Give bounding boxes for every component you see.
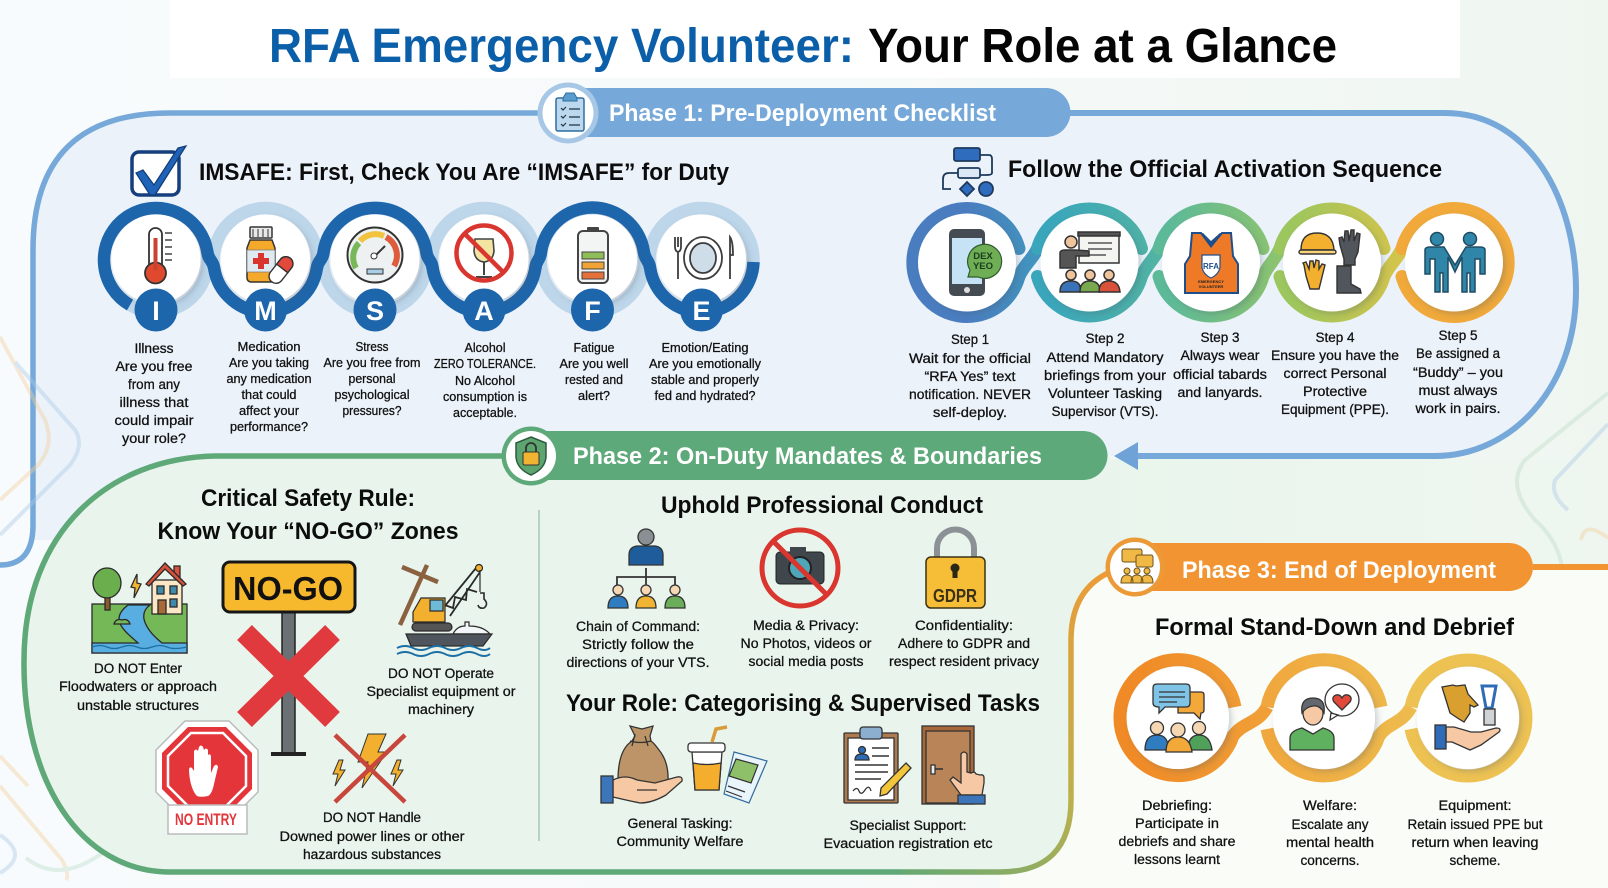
text: medication: that could <box>242 388 296 402</box>
icon: phone with text bubble <box>949 229 1002 296</box>
text: step 5: must always <box>1418 383 1498 398</box>
icon: plate and cutlery <box>675 237 733 279</box>
icon: tabard vest: VOLUNTEER <box>1199 284 1223 289</box>
text: fatigue: Fatigue <box>574 341 614 355</box>
icon: debrief group <box>1121 549 1153 583</box>
text: do not enter: Floodwaters or approach <box>59 679 217 694</box>
text: illness: could impair <box>114 413 194 428</box>
icon: flood and house <box>92 563 187 653</box>
heading: critical safety rule <box>158 485 458 545</box>
text: do not operate <box>366 666 516 717</box>
text: emotion: Are you emotionally <box>649 357 762 371</box>
text: do not operate: Specialist equipment or <box>366 684 516 699</box>
imsafe letters: A <box>474 296 494 326</box>
text: debriefing: Debriefing: <box>1142 798 1212 813</box>
text: do not handle <box>280 810 465 862</box>
icon: hand with bag <box>601 726 682 803</box>
text: medication <box>226 340 312 434</box>
text: debriefing: Participate in <box>1135 816 1219 831</box>
text: media and privacy: No Photos, videos or <box>740 636 872 651</box>
text: illness: illness that <box>120 395 189 410</box>
imsafe letters <box>134 288 723 332</box>
text: step 5 <box>1413 328 1503 416</box>
phase 1 banner: Phase 1: Pre-Deployment Checklist <box>609 100 996 127</box>
text: medication: Are you taking <box>229 356 309 370</box>
text: alcohol <box>434 341 536 420</box>
activation heading: Follow the Official Activation Sequence <box>1008 156 1442 183</box>
phase 1 banner <box>538 82 1070 144</box>
text: step 3 <box>1173 330 1267 400</box>
text: step 1: Step 1 <box>951 332 989 347</box>
text: illness: from any <box>128 377 180 392</box>
text: stress: personal <box>348 372 396 386</box>
text: stress <box>324 340 420 418</box>
text: do not enter: unstable structures <box>77 698 199 713</box>
text: step 5: “Buddy” – you <box>1413 365 1503 380</box>
text: equipment: Retain issued PPE but <box>1408 817 1543 832</box>
text: media and privacy: social media posts <box>748 654 864 669</box>
text: chain of command <box>566 619 710 670</box>
panel: phase 2 background and outline <box>24 456 1110 872</box>
imsafe letters: M <box>254 296 277 326</box>
text: emotion: stable and properly <box>651 373 760 387</box>
icon: equipment return <box>1435 685 1500 750</box>
text: step 1: Wait for the official <box>909 351 1031 366</box>
text: step 4: Protective <box>1303 384 1367 399</box>
icon: crane and boat <box>397 564 492 656</box>
text: step 3: Step 3 <box>1200 330 1240 345</box>
heading: critical safety rule: Critical Safety Rule: <box>201 485 415 512</box>
text: step 3: official tabards <box>1173 367 1267 382</box>
text: illness: your role? <box>122 431 186 446</box>
text: fatigue: rested and <box>565 373 623 387</box>
icon: checkbox <box>132 146 186 195</box>
text: medication: any medication <box>226 372 312 386</box>
icon: no entry stop sign <box>156 721 258 834</box>
imsafe letters: S <box>366 296 384 326</box>
text: illness: Are you free <box>116 359 192 374</box>
icon: clipboard and pencil <box>844 727 911 803</box>
text: medication: performance? <box>230 420 308 434</box>
text: do not operate: DO NOT Operate <box>388 666 494 681</box>
text: chain of command: Strictly follow the <box>582 637 694 652</box>
text: welfare <box>1286 798 1374 868</box>
text: fatigue: alert? <box>578 389 610 403</box>
text: do not handle: hazardous substances <box>303 847 441 862</box>
text: alcohol: acceptable. <box>453 406 517 420</box>
icon: tabard vest <box>1185 233 1238 293</box>
imsafe white circles <box>112 214 746 304</box>
text: debriefing: lessons learnt <box>1134 852 1220 867</box>
text: welfare: concerns. <box>1300 853 1360 868</box>
text: debriefing <box>1118 798 1236 867</box>
phase 3 white circles <box>1127 667 1519 769</box>
title <box>269 20 1337 73</box>
icon: no-go sign: NO-GO <box>233 570 343 607</box>
upper right pale green region <box>1100 459 1608 574</box>
icon: drink cup <box>688 727 727 790</box>
text: media and privacy <box>740 618 872 669</box>
icon: tabard vest: EMERGENCY <box>1198 279 1224 284</box>
icon: shield with padlock <box>516 437 546 475</box>
text: step 2: Supervisor (VTS). <box>1052 404 1158 419</box>
text: equipment <box>1408 798 1543 868</box>
text: do not handle: DO NOT Handle <box>323 810 421 825</box>
icon: no-go sign <box>223 562 355 756</box>
text: step 2: Attend Mandatory <box>1046 350 1164 365</box>
imsafe letters: I <box>152 296 160 326</box>
text: chain of command: directions of your VTS. <box>566 655 710 670</box>
icon: protective equipment <box>1299 230 1361 293</box>
text: step 1: notification. NEVER <box>909 387 1031 402</box>
text: alcohol: No Alcohol <box>455 374 515 388</box>
text: step 3: Always wear <box>1180 348 1260 363</box>
phase 2 banner <box>502 426 1108 486</box>
text: stress: Are you free from <box>324 356 420 370</box>
text: emotion <box>649 341 762 403</box>
title backing <box>170 0 1460 78</box>
text: step 1: self-deploy. <box>933 405 1007 420</box>
text: stress: psychological <box>334 388 410 402</box>
text: confidentiality: Adhere to GDPR and <box>898 636 1030 651</box>
background decorative swirls <box>0 337 1608 880</box>
text: step 4 <box>1271 330 1399 417</box>
text: step 2 <box>1044 331 1167 419</box>
text: emotion: Emotion/Eating <box>662 341 748 355</box>
icon: medication <box>247 227 296 286</box>
text: step 2: Volunteer Tasking <box>1048 386 1162 401</box>
text: specialist support: Specialist Support: <box>850 818 966 833</box>
text: step 2: briefings from your <box>1044 368 1167 383</box>
text: step 3: and lanyards. <box>1178 385 1262 400</box>
text: equipment: return when leaving <box>1412 835 1538 850</box>
icon: no entry stop sign: NO ENTRY <box>175 810 237 829</box>
text: confidentiality: respect resident privacy <box>889 654 1039 669</box>
panel: phase 3 background <box>1000 567 1608 888</box>
imsafe heading: IMSAFE: First, Check You Are “IMSAFE” for Duty <box>199 159 730 186</box>
text: chain of command: Chain of Command: <box>576 619 700 634</box>
activation sequence rings <box>913 208 1508 316</box>
text: welfare: Welfare: <box>1303 798 1357 813</box>
text: step 1 <box>909 332 1031 420</box>
text: do not handle: Downed power lines or other <box>280 829 465 844</box>
icon: briefing presenter <box>1060 232 1120 292</box>
phase 3 banner <box>1106 538 1608 596</box>
heading: uphold professional conduct: Uphold Professional Conduct <box>661 492 983 519</box>
text: welfare: mental health <box>1286 835 1374 850</box>
text: welfare: Escalate any <box>1292 817 1369 832</box>
icon: no power lines <box>333 734 405 802</box>
imsafe heading <box>132 146 730 195</box>
icon: phone with text bubble: YEO <box>973 261 993 272</box>
text: illness <box>114 341 194 446</box>
phase 3 banner: Phase 3: End of Deployment <box>1182 557 1496 584</box>
text: alcohol: consumption is <box>443 390 527 404</box>
text: stress: pressures? <box>342 404 402 418</box>
icon: clipboard <box>556 93 584 131</box>
text: step 4: Ensure you have the <box>1271 348 1399 363</box>
title: Your Role at a Glance <box>868 20 1337 73</box>
icon: stress gauge <box>348 228 402 282</box>
icon: phone with text bubble: DEX <box>973 251 993 262</box>
phase 2 banner: Phase 2: On-Duty Mandates & Boundaries <box>573 443 1042 470</box>
icon: battery <box>578 227 608 283</box>
text: specialist support <box>824 818 993 851</box>
icon: door and hand <box>922 726 985 804</box>
icon: chain of command <box>608 529 685 608</box>
text: alcohol: ZERO TOLERANCE. <box>434 357 536 371</box>
text: fatigue: Are you well <box>560 357 628 371</box>
text: medication: Medication <box>238 340 300 354</box>
icon: gdpr padlock: GDPR <box>933 586 977 606</box>
text: step 5: Step 5 <box>1438 328 1478 343</box>
icon: tabard vest: RFA <box>1203 262 1219 271</box>
heading: formal stand-down: Formal Stand-Down and Debrief <box>1155 614 1515 641</box>
icon: debrief bubbles and people <box>1145 684 1212 752</box>
icon: leaflet <box>724 752 767 803</box>
text: emotion: fed and hydrated? <box>654 389 756 403</box>
icon: welfare person <box>1290 684 1359 750</box>
icon: no camera <box>762 530 838 606</box>
panel: phase 1 background and outline <box>0 113 1576 565</box>
arrow: phase 1 to phase 2 <box>1114 442 1138 470</box>
text: step 4: correct Personal <box>1284 366 1386 381</box>
imsafe letters: E <box>692 296 711 326</box>
text: do not enter <box>59 661 217 713</box>
text: equipment: Equipment: <box>1438 798 1512 813</box>
text: media and privacy: Media & Privacy: <box>753 618 859 633</box>
text: step 5: Be assigned a <box>1416 346 1500 361</box>
text: do not operate: machinery <box>408 702 474 717</box>
text: fatigue <box>560 341 628 403</box>
activation white circles <box>918 214 1503 312</box>
text: specialist support: Evacuation registration etc <box>824 836 993 851</box>
text: do not enter: DO NOT Enter <box>94 661 182 676</box>
text: alcohol: Alcohol <box>464 341 506 355</box>
heading: critical safety rule: Know Your “NO-GO” Zones <box>158 518 458 545</box>
text: step 2: Step 2 <box>1086 331 1124 346</box>
text: illness: Illness <box>134 341 174 356</box>
text: step 4: Step 4 <box>1316 330 1355 345</box>
imsafe wave ring <box>104 208 754 312</box>
imsafe letters: F <box>584 296 601 326</box>
text: equipment: scheme. <box>1450 853 1500 868</box>
text: stress: Stress <box>356 340 388 354</box>
icon: buddy pair <box>1425 232 1485 292</box>
text: general tasking <box>616 816 744 849</box>
icon: no alcohol <box>456 226 512 280</box>
text: step 4: Equipment (PPE). <box>1281 402 1389 417</box>
text: step 5: work in pairs. <box>1414 401 1500 416</box>
icon: thermometer <box>145 228 172 284</box>
text: confidentiality: Confidentiality: <box>915 618 1013 633</box>
icon: gdpr padlock <box>926 530 985 608</box>
phase 3 rings <box>1120 660 1526 776</box>
title: RFA Emergency Volunteer: <box>269 20 854 73</box>
heading: your role: Your Role: Categorising & Supervised Tasks <box>566 690 1040 717</box>
text: general tasking: General Tasking: <box>628 816 732 831</box>
text: medication: affect your <box>239 404 299 418</box>
text: debriefing: debriefs and share <box>1118 834 1236 849</box>
icon: flowchart <box>943 148 993 196</box>
text: step 1: “RFA Yes” text <box>924 369 1016 384</box>
text: confidentiality <box>889 618 1039 669</box>
activation heading <box>943 148 1442 196</box>
text: general tasking: Community Welfare <box>616 834 744 849</box>
